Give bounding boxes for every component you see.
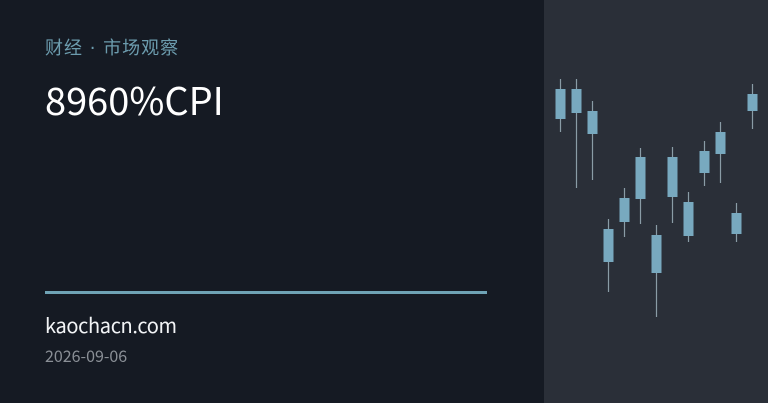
candlestick chart (556, 79, 758, 317)
site name: kaochacn.com (45, 310, 177, 339)
panel: left background (0, 0, 544, 403)
category label: 财经 · 市场观察 (45, 38, 179, 59)
panel: right chart background (544, 0, 768, 403)
title: 8960%CPI (45, 71, 224, 126)
date: 2026-09-06 (45, 343, 127, 367)
accent line (45, 291, 487, 294)
